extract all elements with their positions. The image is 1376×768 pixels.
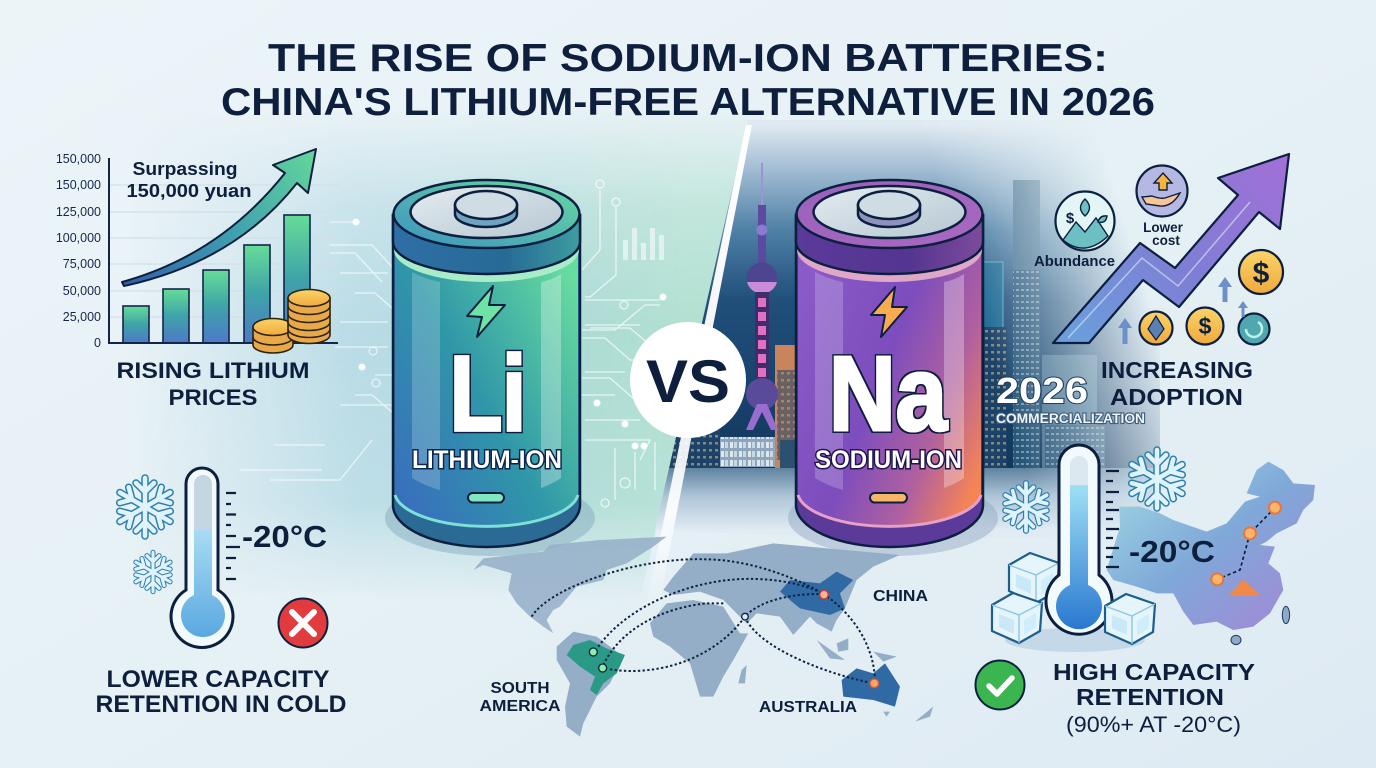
icon: red cross — [278, 598, 328, 648]
indicator pill — [468, 493, 504, 502]
caption — [1101, 357, 1253, 410]
caption: HIGH CAPACITY — [1053, 659, 1255, 685]
temperature label: -20°C — [242, 519, 327, 554]
axis labels: 150,000 — [56, 178, 101, 192]
diagonal divider — [645, 125, 752, 610]
coins and up arrows — [1118, 250, 1283, 344]
caption — [1053, 659, 1255, 737]
panel: lithium cold performance — [96, 468, 346, 718]
callout text: 150,000 yuan — [126, 180, 252, 201]
thermometer — [1046, 445, 1119, 634]
2026 commercialization: 2026 — [996, 370, 1088, 411]
lightning bolt — [871, 287, 907, 337]
axis labels: 0 — [94, 336, 101, 350]
2026 commercialization — [996, 370, 1145, 426]
mini bars decoration — [623, 228, 664, 260]
caption: (90%+ AT -20°C) — [1066, 712, 1241, 737]
thermometer — [171, 468, 240, 648]
lithium-ion label: LITHIUM-ION — [412, 446, 562, 474]
axis labels: 100,000 — [56, 231, 101, 245]
map labels — [480, 588, 928, 716]
China highlight — [780, 572, 853, 615]
ice cubes — [992, 553, 1145, 652]
axis labels: 150,000 — [56, 152, 101, 166]
circuit traces left panel — [240, 219, 395, 480]
chart title — [116, 358, 310, 410]
chart title: PRICES — [168, 385, 258, 410]
map labels: AMERICA — [480, 698, 561, 715]
world map with supply routes — [473, 537, 933, 737]
lightning bolt — [467, 286, 505, 337]
big zigzag arrow — [1053, 154, 1289, 343]
battery: sodium-ion — [788, 180, 998, 556]
icon: abundance: $ — [1066, 210, 1075, 227]
caption: ADOPTION — [1110, 384, 1243, 410]
background — [167, 120, 1376, 768]
Brazil highlight — [567, 640, 625, 695]
chart title: RISING LITHIUM — [116, 358, 310, 383]
coins and up arrows: $ — [1253, 257, 1270, 290]
snowflakes — [1002, 450, 1187, 531]
coin stacks — [253, 290, 330, 353]
caption: RETENTION — [1076, 684, 1224, 710]
Oriental Pearl tower — [746, 163, 778, 430]
Na symbol: Na — [829, 335, 948, 453]
panel: increasing adoption — [996, 154, 1289, 426]
map labels: CHINA — [873, 588, 928, 605]
caption — [96, 666, 346, 718]
caption: INCREASING — [1101, 357, 1253, 383]
rising arrow — [122, 149, 316, 286]
Australia highlight — [842, 663, 900, 707]
sodium-ion label: SODIUM-ION — [815, 446, 962, 474]
indicator pill — [870, 493, 907, 502]
label: abundance: Abundance — [1034, 254, 1115, 270]
axis labels: 25,000 — [63, 310, 101, 324]
chart: rising lithium prices — [56, 149, 338, 410]
map labels: AUSTRALIA — [759, 699, 857, 716]
title — [221, 37, 1155, 124]
VS badge — [630, 322, 746, 438]
Li symbol: Li — [450, 335, 526, 453]
axis labels — [56, 152, 101, 350]
label: lower cost: cost — [1152, 233, 1180, 248]
front ice cube — [1105, 594, 1155, 644]
2026 commercialization: COMMERCIALIZATION — [996, 411, 1145, 426]
temperature label: -20°C — [1129, 534, 1215, 569]
dotted routes — [532, 559, 875, 683]
map labels: SOUTH — [490, 680, 550, 697]
icon: lower cost — [1136, 166, 1188, 216]
caption: LOWER CAPACITY — [106, 666, 330, 693]
title: THE RISE OF SODIUM-ION BATTERIES: — [268, 37, 1108, 80]
callout text: Surpassing — [132, 158, 238, 179]
title: CHINA'S LITHIUM-FREE ALTERNATIVE IN 2026 — [221, 81, 1155, 124]
callout text — [126, 158, 252, 201]
axis labels: 125,000 — [56, 205, 101, 219]
VS badge: VS — [646, 348, 730, 415]
label: lower cost — [1143, 220, 1184, 248]
label: lower cost: Lower — [1143, 220, 1184, 235]
China map — [1107, 462, 1315, 645]
route markers — [589, 590, 879, 688]
circuit traces right of battery — [582, 180, 680, 507]
axis labels: 75,000 — [63, 257, 101, 271]
caption: RETENTION IN COLD — [96, 691, 346, 718]
panel: sodium cold performance — [976, 445, 1315, 737]
axis labels: 50,000 — [63, 284, 101, 298]
icon: green check — [976, 660, 1024, 710]
snowflakes — [115, 478, 175, 592]
coins and up arrows: $ — [1199, 313, 1212, 339]
icon: abundance — [1056, 192, 1114, 250]
skyline buildings — [650, 180, 1105, 470]
battery: lithium-ion — [385, 180, 595, 556]
bars — [123, 215, 310, 343]
